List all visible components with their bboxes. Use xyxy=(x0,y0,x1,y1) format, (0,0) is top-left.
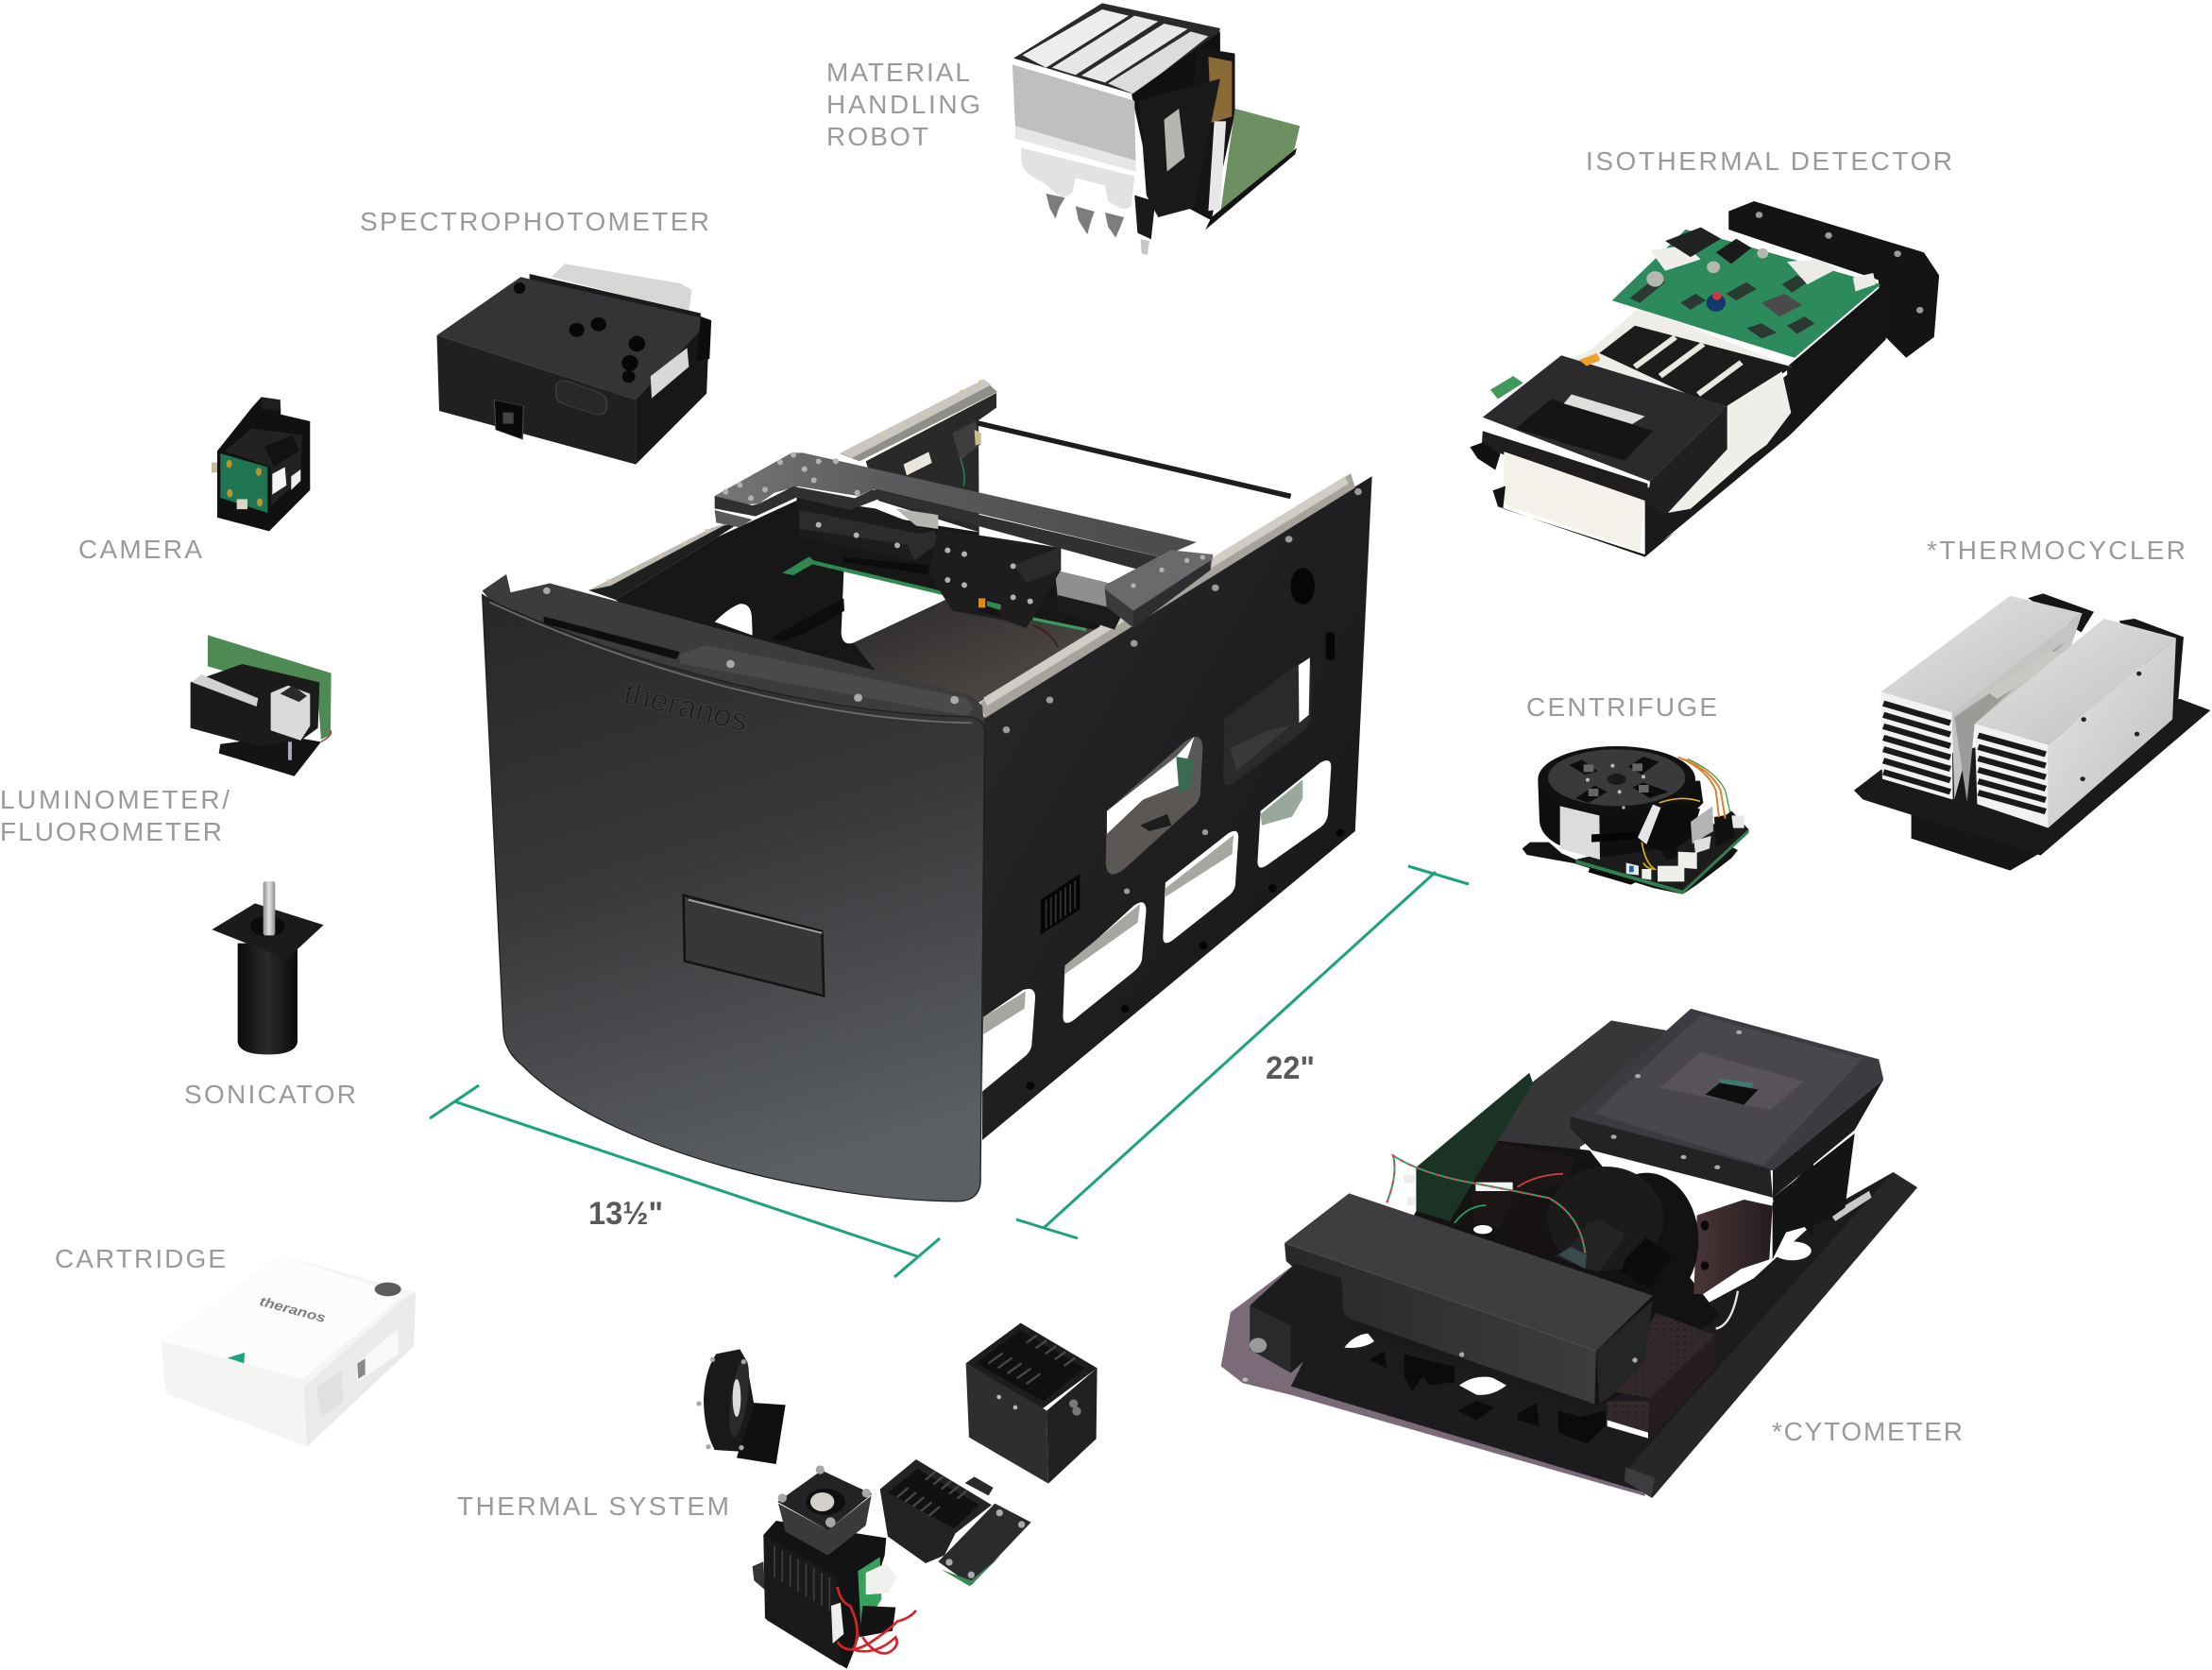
component: thermal system fan and heat sink xyxy=(753,1465,916,1669)
label: centrifuge: CENTRIFUGE xyxy=(1526,692,1717,722)
label: cytometer: *CYTOMETER xyxy=(1772,1417,1963,1446)
front panel recessed window xyxy=(684,895,824,996)
label: material handling robot: MATERIAL xyxy=(826,58,970,87)
rod and right side panel with windows xyxy=(978,423,1372,1140)
cytometer wheel, tower and wires xyxy=(1387,1155,1813,1329)
label: material handling robot: HANDLING xyxy=(826,90,980,119)
label: camera: CAMERA xyxy=(78,535,202,564)
curved front panel xyxy=(483,595,985,1201)
label: material handling robot: ROBOT xyxy=(826,122,928,151)
label: spectrophotometer: SPECTROPHOTOMETER xyxy=(360,207,709,236)
moving carriage on rails xyxy=(715,452,1213,630)
label: luminometer fluorometer: LUMINOMETER/ xyxy=(0,785,230,814)
component: thermal system finned plate xyxy=(880,1459,1031,1586)
cytometer long box, feet and perforated block xyxy=(1285,1193,1716,1443)
component: camera xyxy=(212,397,310,531)
label: thermal system: THERMAL SYSTEM xyxy=(457,1491,729,1521)
label: material handling robot xyxy=(826,58,980,151)
component: isothermal detector xyxy=(1470,201,1939,557)
theranos embossed logo: theranos xyxy=(621,676,752,739)
component: centrifuge xyxy=(1523,746,1749,895)
label: luminometer fluorometer: FLUOROMETER xyxy=(0,817,222,846)
label: luminometer fluorometer xyxy=(0,785,230,846)
cytometer base plate and rear housing xyxy=(1221,1020,1917,1498)
component: cytometer xyxy=(1221,1009,1917,1498)
dimension line: depth xyxy=(1016,866,1469,1238)
component: thermocycler xyxy=(1854,593,2210,871)
label: isothermal detector: ISOTHERMAL DETECTOR xyxy=(1586,146,1952,176)
top foam lip of front panel xyxy=(483,574,985,731)
label: sonicator: SONICATOR xyxy=(184,1080,356,1109)
component: cartridge xyxy=(162,1254,416,1447)
panel rim highlight xyxy=(489,603,972,723)
dimension line: width xyxy=(430,1085,940,1277)
component: spectrophotometer xyxy=(436,264,711,465)
cytometer stage xyxy=(1571,1009,1883,1235)
component: luminometer / fluorometer xyxy=(191,635,332,776)
component: sonicator xyxy=(212,881,324,1054)
rear rail, upright and interior xyxy=(588,380,1115,702)
label: thermocycler: *THERMOCYCLER xyxy=(1927,536,2186,565)
component: thermal system fan bracket xyxy=(696,1349,786,1464)
label: cartridge: CARTRIDGE xyxy=(55,1244,226,1273)
component: material handling robot xyxy=(1012,3,1300,255)
dimension label: depth: 22" xyxy=(1266,1050,1315,1086)
component: cartridge: theranos xyxy=(258,1293,328,1325)
dimension label: width: 13½" xyxy=(588,1196,663,1232)
cytometer camera block xyxy=(1242,1263,1344,1382)
main instrument: open chassis with curved front panel xyxy=(483,380,1372,1201)
component: thermal system finned block xyxy=(966,1323,1097,1484)
